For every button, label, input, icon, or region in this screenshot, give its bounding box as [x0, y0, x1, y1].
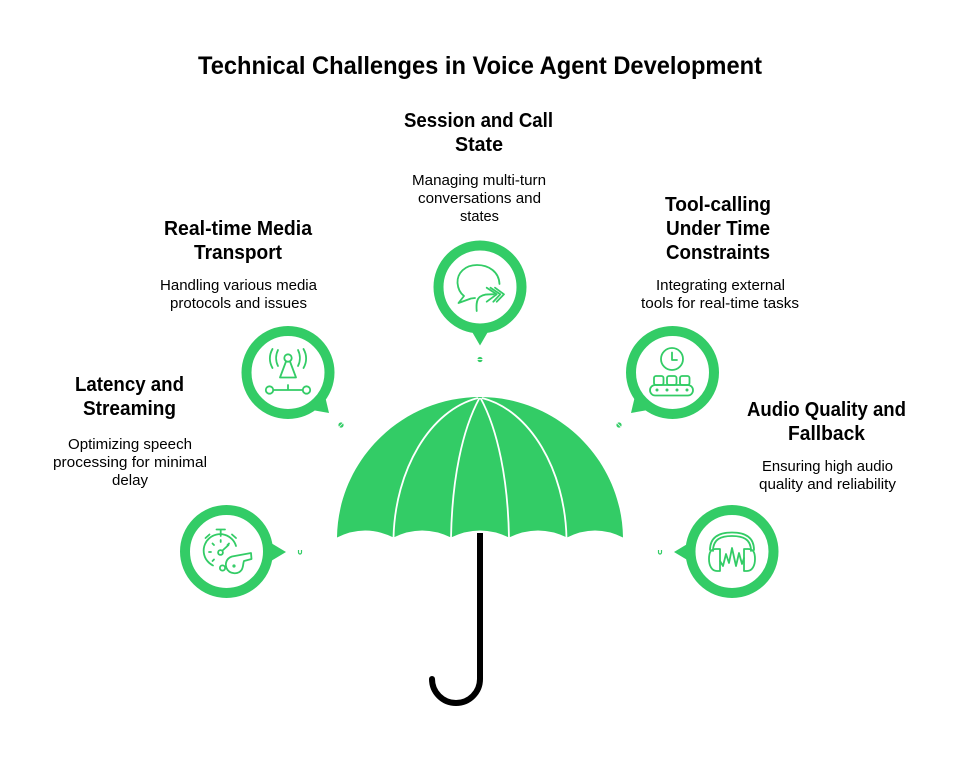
- title: Technical Challenges in Voice Agent Development: [198, 52, 763, 80]
- icon: antenna and network: [266, 349, 310, 394]
- description: states: [460, 208, 499, 225]
- heading: [75, 374, 184, 420]
- connector dot: [338, 422, 344, 428]
- description: [53, 436, 207, 489]
- umbrella handle: [432, 533, 480, 703]
- heading: Latency and: [75, 374, 184, 396]
- description: Optimizing speech: [68, 436, 192, 453]
- pin marker: [674, 510, 774, 593]
- icon: speech bubbles with arrows: [457, 265, 504, 311]
- heading: Transport: [194, 242, 282, 264]
- heading: Session and Call: [404, 110, 553, 132]
- description: [759, 458, 897, 493]
- description: delay: [112, 472, 149, 489]
- heading: Fallback: [788, 423, 866, 445]
- heading: [665, 194, 771, 264]
- umbrella canopy: [337, 397, 623, 538]
- description: Integrating external: [656, 277, 785, 294]
- pin marker: [438, 246, 522, 346]
- heading: Streaming: [83, 398, 176, 420]
- heading: Audio Quality and: [747, 399, 906, 421]
- description: [160, 277, 318, 312]
- connector dot: [616, 422, 622, 428]
- heading: [404, 110, 553, 156]
- heading: Real-time Media: [164, 218, 313, 240]
- connector dot: [477, 357, 483, 362]
- heading: Under Time: [666, 218, 770, 240]
- pin marker: [185, 510, 286, 593]
- connector dot: [298, 550, 302, 554]
- icon: clock and conveyor: [650, 348, 693, 396]
- heading: Constraints: [666, 242, 770, 264]
- description: [412, 172, 546, 225]
- description: conversations and: [418, 190, 541, 207]
- heading: Tool-calling: [665, 194, 771, 216]
- description: tools for real-time tasks: [641, 295, 799, 312]
- description: protocols and issues: [170, 295, 307, 312]
- icon: stopwatch and whistle: [204, 530, 252, 573]
- panel: real-time media transport: [160, 218, 344, 428]
- heading: [164, 218, 313, 264]
- description: processing for minimal: [53, 454, 207, 471]
- panel: latency and streaming: [53, 374, 302, 593]
- description: [641, 277, 799, 312]
- pin marker: [246, 331, 330, 414]
- connector dot: [658, 550, 662, 554]
- panel: audio quality and fallback: [658, 399, 906, 593]
- description: Ensuring high audio: [762, 458, 893, 475]
- description: Managing multi-turn: [412, 172, 546, 189]
- panel: tool-calling under time constraints: [616, 194, 799, 428]
- panel: session and call state: [404, 110, 553, 362]
- heading: State: [455, 134, 503, 156]
- description: Handling various media: [160, 277, 318, 294]
- umbrella: [337, 397, 623, 703]
- heading: [747, 399, 906, 445]
- description: quality and reliability: [759, 476, 897, 493]
- icon: headphones with waveform: [709, 532, 755, 571]
- pin marker: [631, 331, 714, 414]
